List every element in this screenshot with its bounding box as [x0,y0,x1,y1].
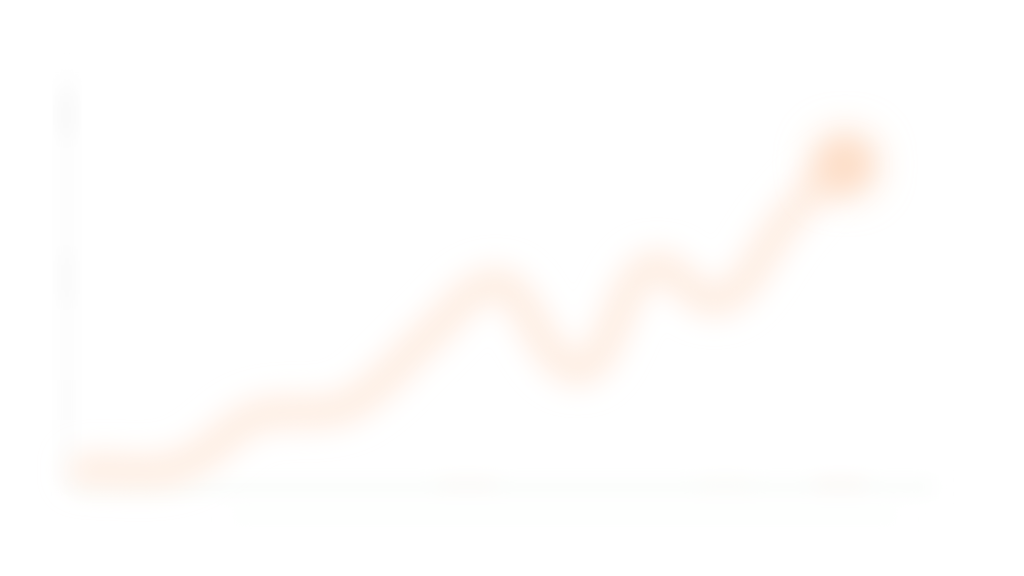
data line [85,165,845,471]
x axis with blurred labels [70,478,935,522]
y axis with blurred labels [58,75,76,490]
end point highlight [813,132,877,196]
